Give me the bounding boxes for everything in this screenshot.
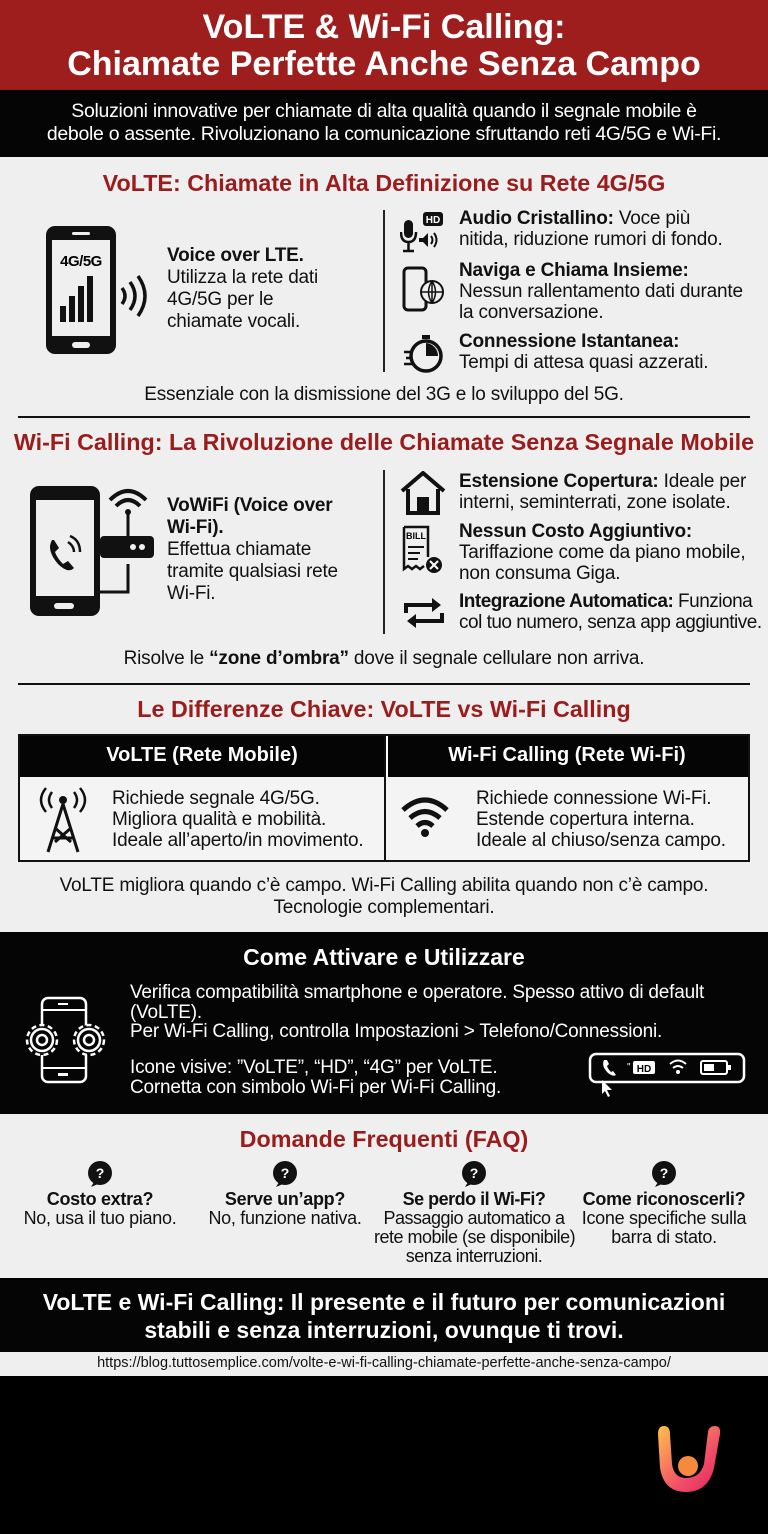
faq 3: Passaggio automatico a: [383, 1208, 565, 1228]
text: estensione: interni, seminterrati, zone isolate.: [459, 492, 731, 513]
text: Wi-Fi column: Richiede connessione Wi-Fi.: [476, 788, 711, 809]
table header Wi-Fi: Wi-Fi Calling (Rete Wi-Fi): [448, 744, 686, 766]
text: Voice over LTE: [167, 245, 318, 332]
subtitle band: [0, 90, 768, 157]
text: Wi-Fi column: Estende copertura interna.: [476, 809, 695, 830]
text: Voice over LTE: Utilizza la rete dati: [167, 267, 318, 288]
text: istruzioni: [130, 982, 704, 1042]
faq 3: [374, 1161, 575, 1266]
text: audio: Audio Cristallino: Voce più: [459, 208, 690, 229]
text: VoWiFi: VoWiFi (Voice over: [167, 495, 332, 516]
faq 1: Costo extra?: [47, 1189, 153, 1209]
text: costo: Nessun Costo Aggiuntivo:: [459, 521, 692, 542]
faq 2: [208, 1161, 362, 1228]
conclusion band: VoLTE e Wi-Fi Calling: Il presente e il futuro per comunicazioni: [43, 1289, 725, 1315]
text: connessione: Connessione Istantanea:: [459, 331, 679, 352]
icon: sync arrows: [404, 598, 444, 628]
text: naviga: [459, 260, 743, 323]
text: integrazione: Integrazione Automatica: Funziona: [459, 591, 752, 612]
note: complementari: [60, 875, 708, 918]
text: integrazione: col tuo numero, senza app aggiuntive.: [459, 612, 762, 633]
text: costo: Tariffazione come da piano mobile,: [459, 542, 745, 563]
text: costo: non consuma Giga.: [459, 563, 620, 584]
text: Wi-Fi column: Ideale al chiuso/senza campo.: [476, 830, 726, 851]
header: title: Chiamate Perfette Anche Senza Campo: [67, 45, 701, 83]
header: title: [0, 0, 768, 90]
feature list: Wi-Fi: [400, 471, 762, 633]
text: icone visive: Icone visive: ”VoLTE”, “HD”, “4G” per VoLTE.: [130, 1057, 497, 1078]
icon: phone globe: [402, 266, 444, 312]
table header VoLTE: VoLTE (Rete Mobile): [106, 744, 298, 766]
text: costo: [459, 521, 745, 584]
text: naviga: Naviga e Chiama Insieme:: [459, 260, 689, 281]
text: estensione: Estensione Copertura: Ideale per: [459, 471, 746, 492]
heading: differenze: Le Differenze Chiave: VoLTE vs Wi-Fi Calling: [137, 696, 631, 722]
faq 2: No, funzione nativa.: [208, 1208, 362, 1228]
subtitle band: Soluzioni innovative per chiamate di alta qualità quando il segnale mobile è: [71, 100, 697, 122]
text: connessione: [459, 331, 708, 373]
conclusion band: [0, 1280, 768, 1352]
text: icone visive: Cornetta con simbolo Wi-Fi per Wi-Fi Calling.: [130, 1077, 501, 1098]
text: audio: [459, 208, 723, 250]
icon: phone gears: [26, 996, 106, 1084]
text: audio: nitida, riduzione rumori di fondo.: [459, 229, 723, 250]
icon: mic HD: [400, 212, 443, 252]
text: VoLTE column: [112, 788, 364, 851]
divider: [383, 210, 385, 372]
faq 1: ?: [96, 1165, 104, 1181]
text: VoWiFi: Wi-Fi).: [167, 517, 223, 538]
section: FAQ: [0, 1114, 768, 1278]
text: connessione: Tempi di attesa quasi azzerati.: [459, 352, 708, 373]
text: istruzioni: (VoLTE).: [130, 1002, 202, 1022]
faq 3: Se perdo il Wi-Fi?: [403, 1189, 545, 1209]
icon: phone with router: [30, 486, 154, 616]
heading: Wi-Fi Calling: Wi-Fi Calling: La Rivoluzione delle Chiamate Senza Segnale Mobile: [14, 429, 754, 455]
text: icone visive: [130, 1057, 501, 1098]
icon: status bar: HD: [637, 1064, 651, 1075]
faq 3: rete mobile (se disponibile): [374, 1227, 575, 1247]
note: zone d'ombra: Risolve le “zone d’ombra” dove il segnale cellulare non arriva.: [124, 648, 644, 669]
note: 3G: Essenziale con la dismissione del 3G e lo sviluppo del 5G.: [144, 384, 624, 405]
section: come attivare: [0, 932, 768, 1114]
text: naviga: la conversazione.: [459, 302, 603, 323]
note: complementari: VoLTE migliora quando c’è campo. Wi-Fi Calling abilita quando non c’è campo.: [60, 875, 708, 896]
faq 4: barra di stato.: [611, 1227, 717, 1247]
text: estensione: [459, 471, 746, 513]
header: title: VoLTE & Wi-Fi Calling:: [203, 8, 565, 46]
faq 4: Come riconoscerli?: [583, 1189, 745, 1209]
faq 2: ?: [281, 1165, 289, 1181]
comparison table: [18, 734, 750, 862]
text: istruzioni: Per Wi-Fi Calling, controlla Impostazioni > Telefono/Connessioni.: [130, 1021, 662, 1042]
text: VoLTE column: Richiede segnale 4G/5G.: [112, 788, 320, 809]
text: VoWiFi: Wi-Fi.: [167, 583, 215, 604]
text: naviga: Nessun rallentamento dati durante: [459, 281, 743, 302]
text: Wi-Fi column: [476, 788, 726, 851]
text: Voice over LTE: 4G/5G per le: [167, 289, 273, 310]
source url: https://blog.tuttosemplice.com/volte-e-wi-fi-calling-chiamate-perfette-anche-senza-campo/: [97, 1355, 671, 1371]
faq 2: Serve un’app?: [225, 1189, 345, 1209]
faq 3: senza interruzioni.: [406, 1246, 542, 1266]
faq 3: ?: [470, 1165, 478, 1181]
icon: antenna tower: [40, 787, 86, 852]
feature list: VoLTE: [400, 208, 743, 373]
icon: status bar: [588, 1052, 746, 1097]
text: integrazione: [459, 591, 762, 633]
source url: [0, 1352, 768, 1376]
subtitle band: debole o assente. Rivoluzionano la comunicazione sfruttando reti 4G/5G e Wi-Fi.: [47, 123, 721, 145]
text: VoLTE column: Ideale all’aperto/in movimento.: [112, 830, 364, 851]
text: VoLTE column: Migliora qualità e mobilità.: [112, 809, 326, 830]
icon: bill: [402, 526, 442, 573]
text: VoWiFi: [167, 495, 338, 604]
icon: stopwatch: [404, 335, 443, 373]
heading: FAQ: Domande Frequenti (FAQ): [240, 1126, 528, 1152]
heading: VoLTE: VoLTE: Chiamate in Alta Definizione su Rete 4G/5G: [103, 170, 665, 196]
text: VoWiFi: Effettua chiamate: [167, 539, 311, 560]
text: VoWiFi: tramite qualsiasi rete: [167, 561, 338, 582]
faq 1: [24, 1161, 176, 1228]
icon: phone 4G/5G: [46, 226, 147, 354]
note: complementari: Tecnologie complementari.: [273, 897, 494, 918]
faq 4: ?: [660, 1165, 668, 1181]
logo: [658, 1426, 720, 1492]
icon: mic HD: HD: [426, 215, 440, 226]
conclusion band: stabili e senza interruzioni, ovunque ti trovi.: [144, 1317, 624, 1343]
light main area: [0, 157, 768, 932]
icon: phone 4G/5G: 4G/5G: [60, 253, 102, 270]
faq 1: No, usa il tuo piano.: [24, 1208, 176, 1228]
icon: house: [400, 471, 446, 515]
faq 4: Icone specifiche sulla: [582, 1208, 746, 1228]
text: istruzioni: Verifica compatibilità smartphone e operatore. Spesso attivo di default: [130, 982, 704, 1003]
heading: come attivare: Come Attivare e Utilizzare: [243, 944, 525, 970]
faq 4: [582, 1161, 746, 1247]
text: Voice over LTE: chiamate vocali.: [167, 311, 300, 332]
icon: wifi: [401, 797, 449, 837]
icon: status bar: ": [627, 1062, 631, 1073]
text: Voice over LTE: Voice over LTE.: [167, 245, 304, 266]
icon: bill: BILL: [406, 531, 426, 541]
